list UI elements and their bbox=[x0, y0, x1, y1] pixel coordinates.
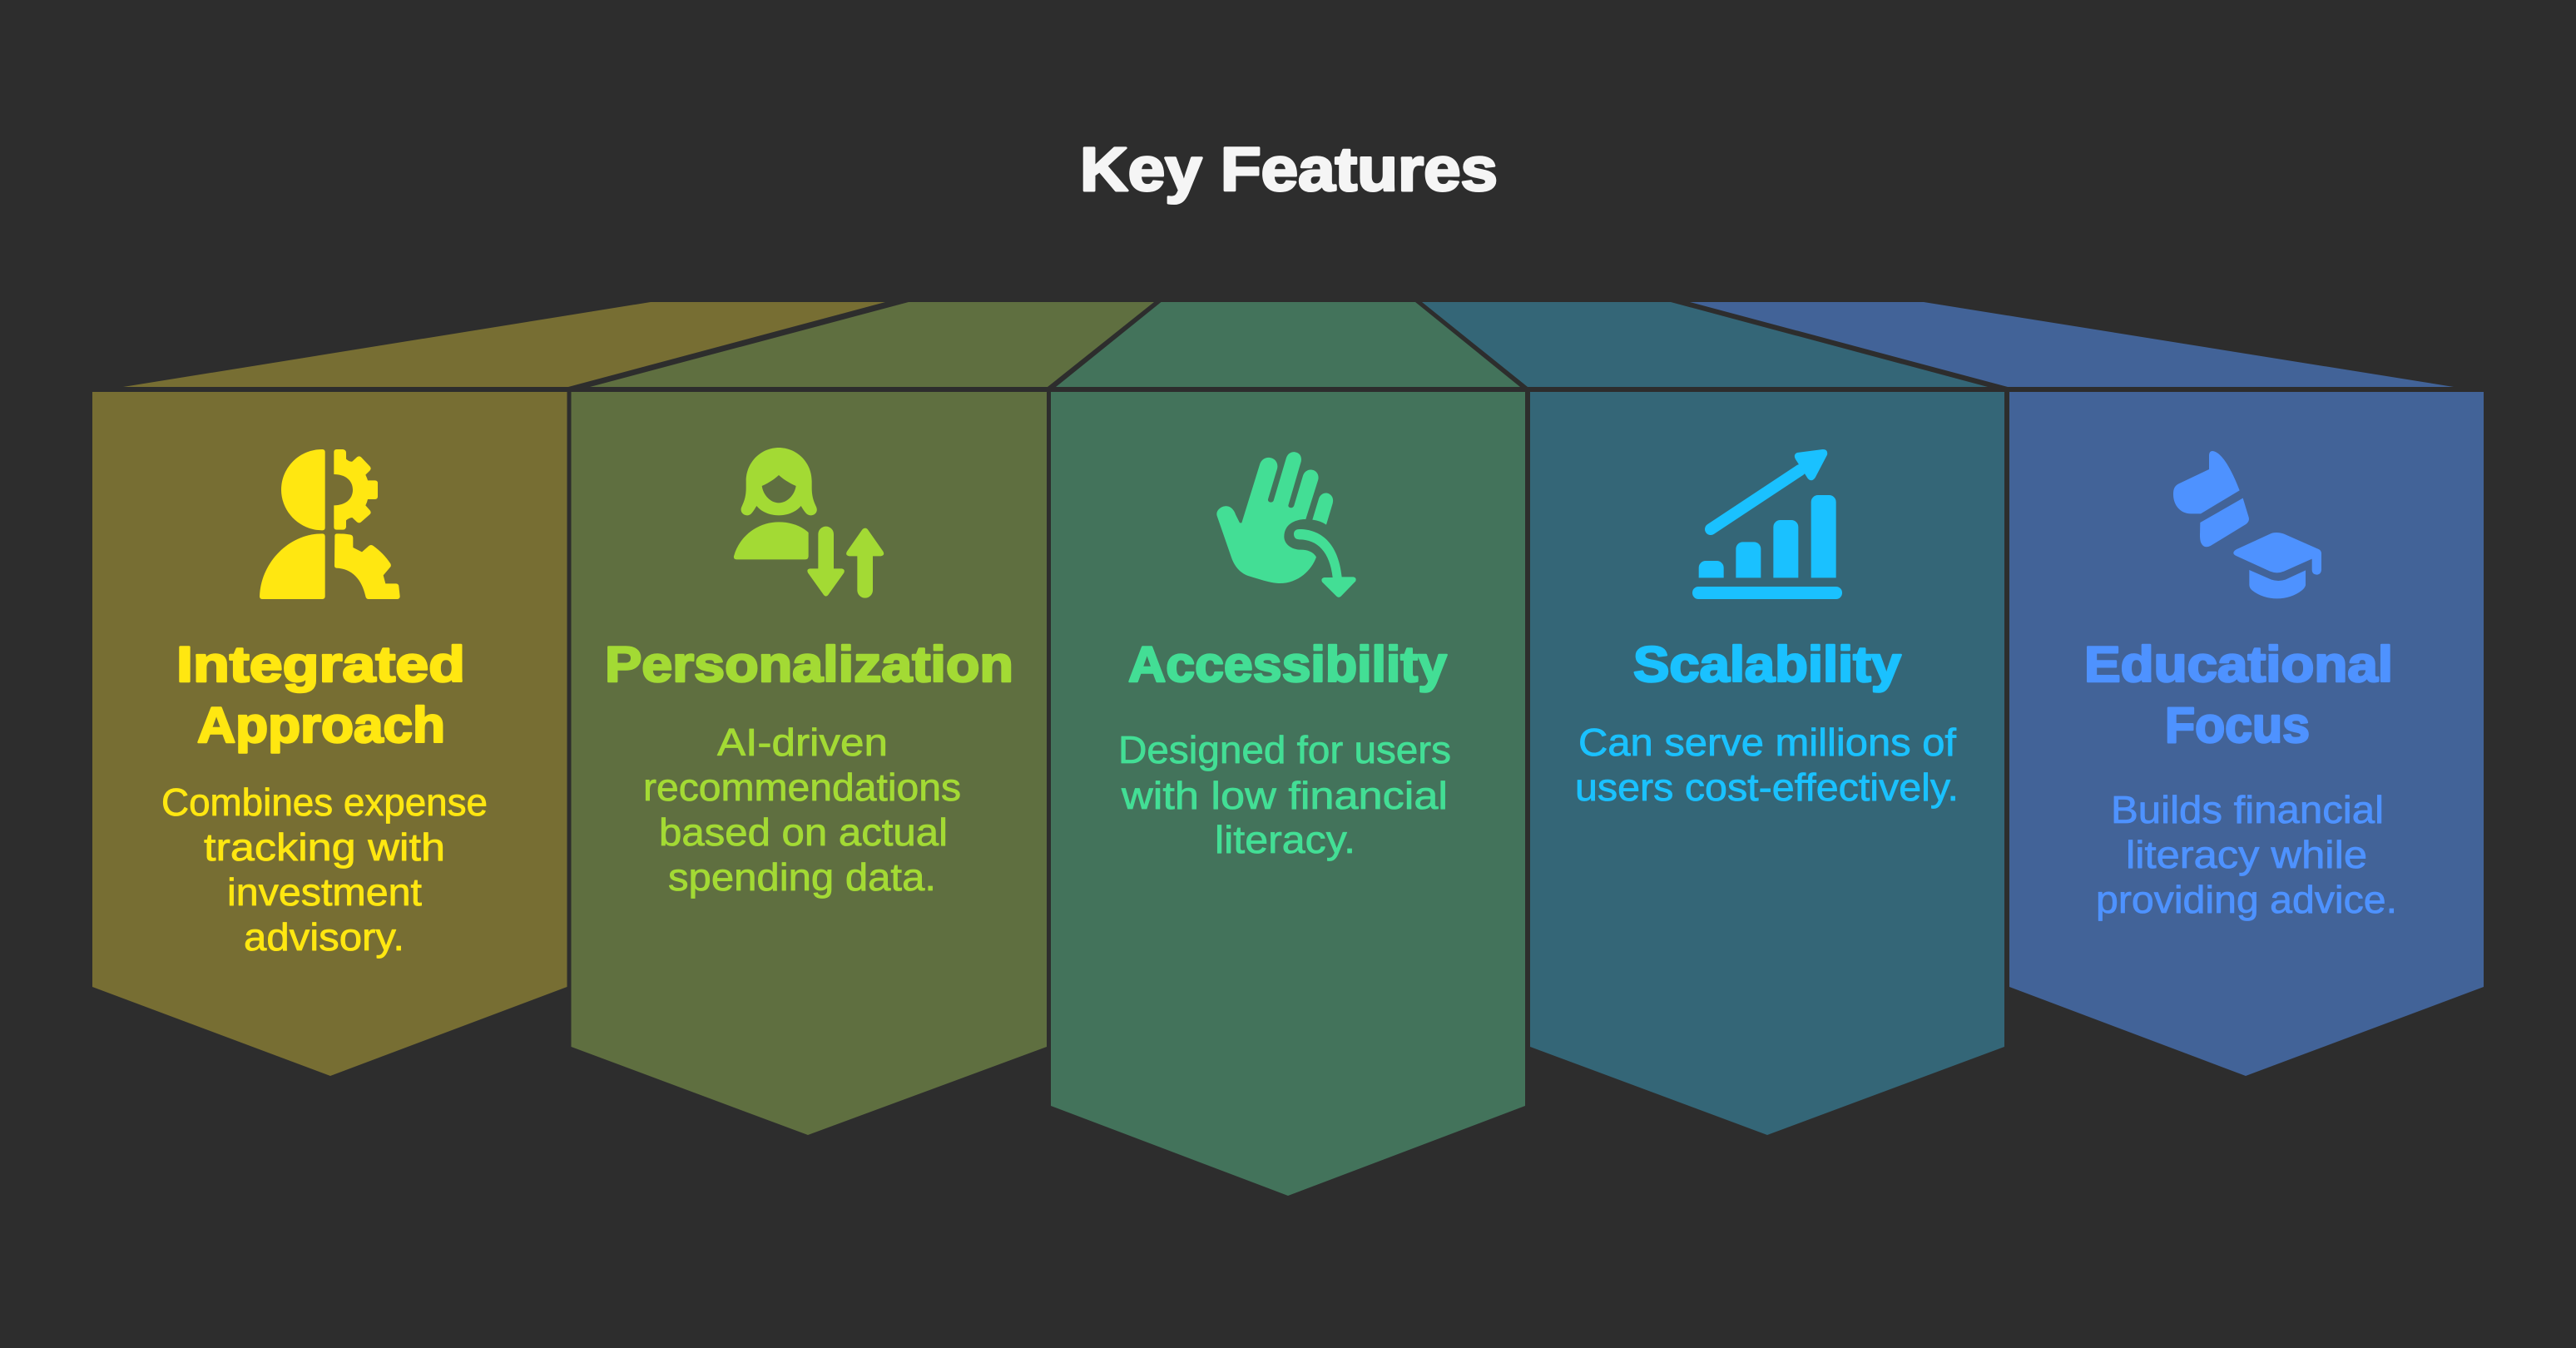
panel: accessibility bbox=[1051, 302, 1525, 1196]
body: accessibility bbox=[1051, 392, 1525, 1196]
icon: graduation cap and pencil bbox=[2173, 451, 2321, 598]
description: educational focus: literacy while bbox=[2126, 833, 2367, 876]
description: accessibility: literacy. bbox=[1215, 818, 1355, 861]
body: scalability bbox=[1530, 392, 2004, 1135]
heading: personalization: Personalization bbox=[605, 637, 1013, 692]
description: scalability bbox=[1575, 721, 1959, 809]
description: educational focus bbox=[2096, 788, 2397, 921]
roof: educational focus bbox=[1690, 302, 2454, 387]
description: personalization: spending data. bbox=[668, 855, 936, 899]
heading: accessibility: Accessibility bbox=[1128, 637, 1448, 692]
description: scalability: users cost-effectively. bbox=[1575, 766, 1959, 809]
heading: scalability: Scalability bbox=[1633, 637, 1902, 692]
panel: personalization bbox=[571, 302, 1154, 1135]
description: accessibility bbox=[1118, 728, 1451, 861]
panel: integrated approach bbox=[92, 302, 885, 1076]
heading: integrated approach: Integrated bbox=[176, 637, 465, 692]
panel: scalability bbox=[1422, 302, 2004, 1135]
description: personalization: based on actual bbox=[659, 810, 948, 854]
description: personalization bbox=[643, 721, 961, 899]
description: integrated approach: advisory. bbox=[244, 915, 404, 959]
icon: growth chart with arrow bbox=[1692, 449, 1842, 599]
description: personalization: AI-driven bbox=[717, 721, 888, 764]
roof: integrated approach bbox=[123, 302, 885, 387]
description: educational focus: providing advice. bbox=[2096, 878, 2397, 921]
icon: person with up and down arrows bbox=[734, 448, 884, 598]
description: integrated approach: investment bbox=[227, 870, 422, 914]
description: personalization: recommendations bbox=[643, 766, 961, 809]
heading: integrated approach: Approach bbox=[197, 697, 445, 753]
body: educational focus bbox=[2009, 392, 2484, 1076]
description: accessibility: with low financial bbox=[1121, 774, 1448, 817]
heading: educational focus: Educational bbox=[2084, 637, 2393, 692]
heading: educational focus: Focus bbox=[2165, 697, 2310, 753]
heading: educational focus bbox=[2084, 637, 2393, 753]
description: accessibility: Designed for users bbox=[1118, 728, 1451, 771]
panel: educational focus bbox=[1690, 302, 2484, 1076]
icon: person with gear bbox=[260, 449, 400, 599]
roof: personalization bbox=[590, 302, 1154, 387]
heading: integrated approach bbox=[176, 637, 465, 753]
title: Key Features bbox=[1080, 135, 1498, 204]
description: scalability: Can serve millions of bbox=[1578, 721, 1956, 764]
roof: accessibility bbox=[1056, 302, 1520, 387]
body: integrated approach bbox=[92, 392, 567, 1076]
description: integrated approach bbox=[161, 781, 488, 959]
description: integrated approach: tracking with bbox=[204, 825, 445, 869]
icon: hand with arrow bbox=[1216, 452, 1356, 597]
roof: scalability bbox=[1422, 302, 1988, 387]
description: integrated approach: Combines expense bbox=[161, 781, 488, 824]
body: personalization bbox=[571, 392, 1047, 1135]
description: educational focus: Builds financial bbox=[2111, 788, 2384, 831]
